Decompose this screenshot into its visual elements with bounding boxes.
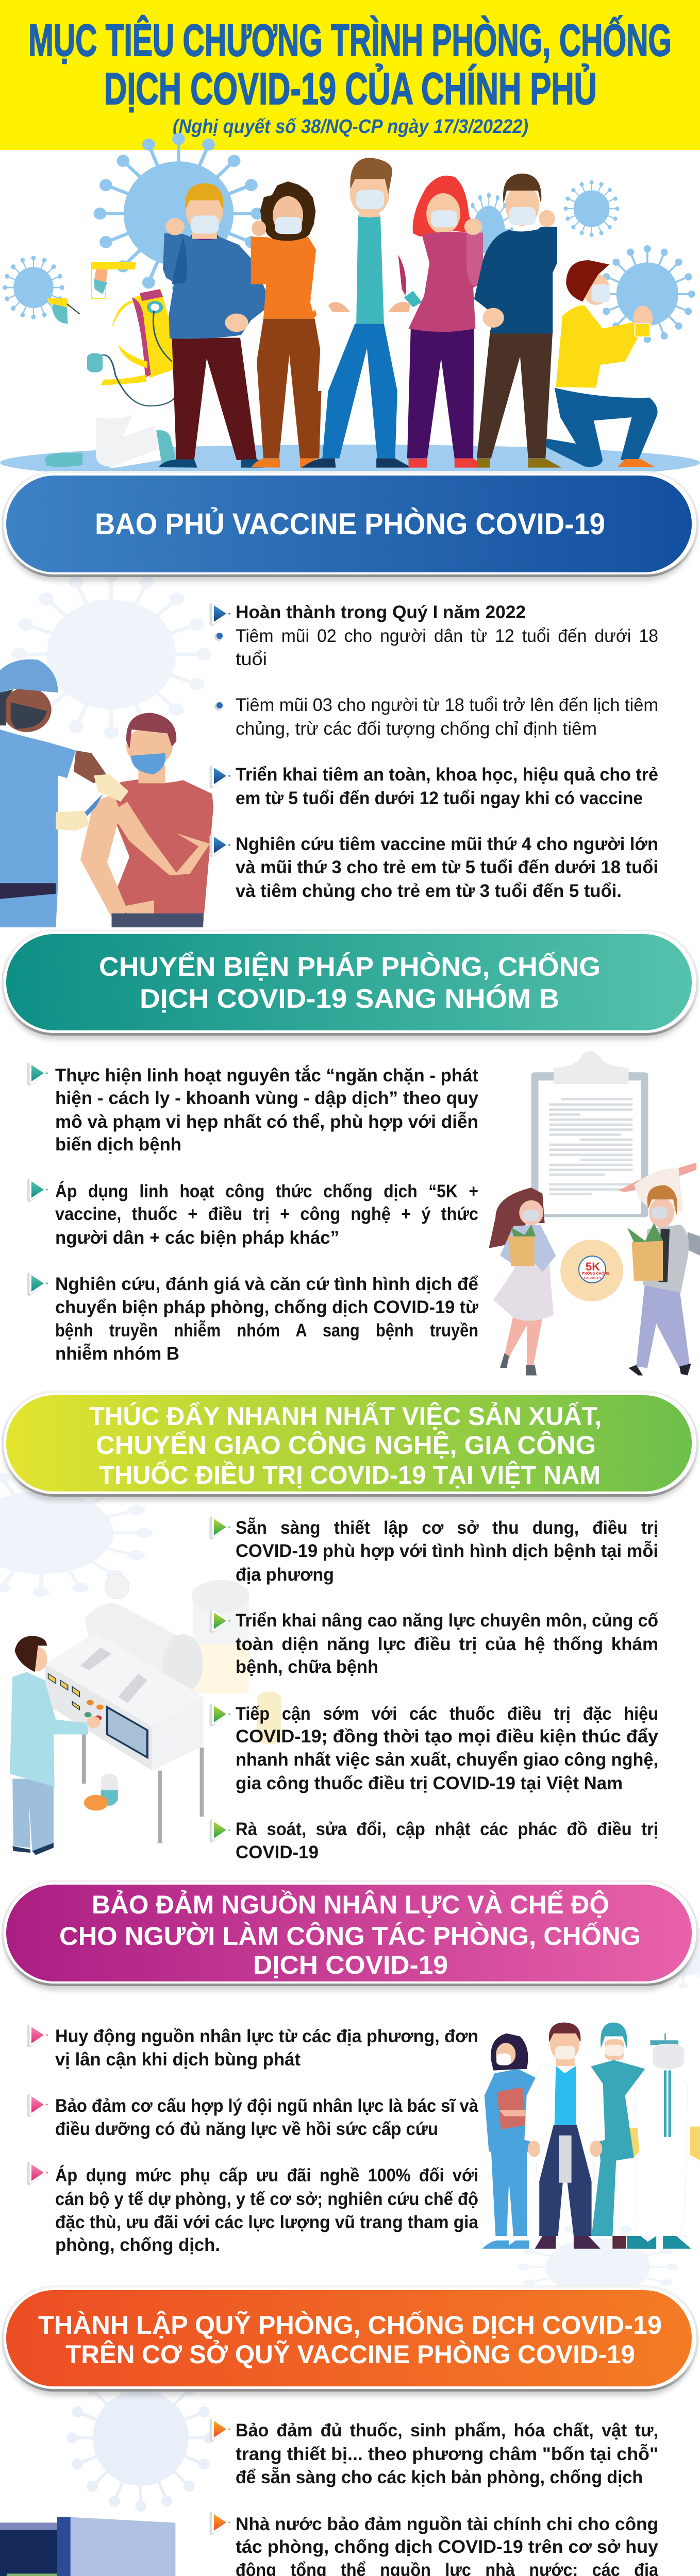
text: specific drugs: Tiếp cận sớm với các thuốc điều trị đặc hiệu	[236, 1704, 658, 1724]
text: second dose: tuổi	[236, 649, 267, 669]
icon: pills	[84, 1774, 118, 1810]
heading text: DỊCH COVID-19 SANG NHÓM B	[140, 984, 559, 1014]
bullets: section 3	[211, 1517, 659, 1862]
heading text: THÚC ĐẨY NHANH NHẤT VIỆC SẢN XUẤT,	[89, 1402, 602, 1431]
text: second dose	[236, 626, 658, 669]
bullet icon	[211, 1518, 230, 1538]
text: research fourth dose	[236, 834, 658, 901]
text: research fourth dose: và mũi thứ 3 cho trẻ em từ 5 tuổi đến dưới 18 tuổi	[236, 857, 658, 877]
illustration: nurse vaccinating a patient	[0, 659, 213, 927]
bullet icon	[211, 836, 230, 856]
icon: 5K badge: COVID-19	[584, 1277, 601, 1280]
icon: 5K badge	[560, 1240, 623, 1301]
text: research and assess: chuyển biện pháp phòng, chống dịch COVID-19 từ	[55, 1297, 479, 1317]
hazmat worker	[625, 2033, 700, 2249]
person: doctor in white coat	[302, 158, 422, 468]
text: children vaccination: Triển khai tiêm an toàn, khoa học, hiệu quả cho trẻ	[236, 765, 658, 785]
text: 5K formula: người dân + các biện pháp khác”	[55, 1228, 339, 1248]
bullet icon	[29, 2026, 48, 2046]
person: orange sweater	[251, 181, 337, 468]
text: 5K formula	[55, 1181, 478, 1248]
illustration: clipboard and shoppers	[489, 1051, 700, 1376]
illustration: medical team	[482, 2023, 700, 2249]
bullet icon	[211, 1612, 230, 1632]
text: allowances: Áp dụng mức phụ cấp ưu đãi nghề 100% đối với	[55, 2165, 478, 2185]
text: specific drugs: nhanh nhất việc sản xuất, chuyển giao công nghệ,	[236, 1750, 658, 1770]
text: specific drugs: COVID-19; đồng thời tạo mọi điều kiện thúc đẩy	[236, 1726, 659, 1747]
text: supplies: Bảo đảm đủ thuốc, sinh phẩm, hóa chất, vật tư,	[236, 2420, 658, 2441]
nurse with clipboard	[482, 2033, 536, 2249]
bullet icon	[211, 767, 230, 787]
text: treatment facilities: Sẵn sàng thiết lập cơ sở thu dung, điều trị	[236, 1517, 658, 1538]
text: children vaccination	[236, 765, 658, 808]
bullets: section 1	[211, 602, 658, 901]
text: improve capacity: toàn diện năng lực điều trị của hệ thống khám	[236, 1634, 658, 1654]
text: supplies	[236, 2420, 658, 2487]
text: research and assess	[55, 1274, 479, 1364]
person: blue sweater	[158, 183, 266, 468]
heading text: TRÊN CƠ SỞ QUỸ VACCINE PHÒNG COVID-19	[65, 2340, 635, 2369]
title	[28, 15, 672, 114]
text: staffing structure	[55, 2096, 478, 2139]
text: mobilise staff: Huy động nguồn nhân lực từ các địa phương, đơn	[55, 2026, 478, 2046]
text: second dose: Tiêm mũi 02 cho người dân từ 12 tuổi đến dưới 18	[236, 626, 658, 646]
shopper: woman	[489, 1188, 556, 1376]
heading text	[59, 1890, 641, 1979]
text: children vaccination: em từ 5 tuổi đến dưới 12 tuổi ngay khi có vaccine	[236, 788, 643, 808]
person: pink sweater	[407, 176, 487, 468]
technician	[10, 1636, 101, 1855]
person: sprayer in protective suit	[45, 262, 178, 468]
illustration: man opening vault	[0, 2517, 218, 2576]
text: third dose	[236, 695, 658, 739]
heading: accelerate production	[2, 1391, 698, 1501]
bullets: section 2	[29, 1064, 479, 1364]
text: treatment facilities	[236, 1517, 658, 1585]
heading: human resources	[2, 1880, 698, 1990]
machine	[45, 1574, 281, 1843]
heading text: THUỐC ĐIỀU TRỊ COVID-19 TẠI VIỆT NAM	[99, 1460, 601, 1489]
text: 5K formula: Áp dụng linh hoạt công thức chống dịch “5K +	[55, 1181, 478, 1201]
vault door	[57, 2517, 175, 2576]
clipboard	[531, 1051, 700, 1256]
heading text: BẢO ĐẢM NGUỒN NHÂN LỰC VÀ CHẾ ĐỘ	[92, 1890, 609, 1919]
text: mobilise staff: vị lân cận khi dịch bùng phát	[55, 2049, 301, 2070]
watermark: background viruses	[0, 570, 700, 2576]
text: 5K formula: vaccine, thuốc + điều trị + công nghệ + ý thức	[55, 1204, 478, 1224]
vault interior	[0, 2523, 67, 2576]
bullet icon	[211, 604, 230, 624]
floor	[0, 445, 700, 481]
bullet icon	[29, 1274, 48, 1294]
text: review protocols: Rà soát, sửa đổi, cập nhật các phác đồ điều trị	[236, 1819, 658, 1839]
text: allowances: phòng, chống dịch.	[55, 2235, 220, 2255]
subtitle: (Nghị quyết số 38/NQ-CP ngày 17/3/20222)	[173, 116, 528, 138]
text: research fourth dose: và tiêm chủng cho trẻ em từ 3 tuổi đến 5 tuổi.	[236, 881, 622, 901]
text: research and assess: Nghiên cứu, đánh giá và căn cứ tình hình dịch để	[55, 1274, 478, 1294]
text: staffing structure: điều dưỡng có đủ năng lực về hồi sức cấp cứu	[55, 2119, 438, 2139]
bullets: section 5	[211, 2420, 659, 2576]
text: flexible principle: hiện - cách ly - khoanh vùng - dập dịch” theo quy	[55, 1088, 479, 1108]
heading: fund	[2, 2285, 698, 2396]
text: research and assess: bệnh truyền nhiễm nhóm A sang bệnh truyền	[55, 1320, 478, 1341]
heading text: DỊCH COVID-19	[253, 1951, 448, 1979]
person: navy sweater	[474, 174, 562, 468]
text: research fourth dose: Nghiên cứu tiêm vaccine mũi thứ 4 cho người lớn	[236, 834, 658, 854]
text: supplies: trang thiết bị... theo phương châm "bốn tại chỗ"	[236, 2444, 658, 2464]
heading text	[38, 2310, 662, 2369]
text: allowances	[55, 2165, 479, 2255]
surgeon	[587, 2023, 656, 2249]
text: third dose: chủng, trừ các đối tượng chống chỉ định tiêm	[236, 719, 597, 739]
text: review protocols: COVID-19	[236, 1842, 319, 1862]
text: state funding: Nhà nước bảo đảm nguồn tài chính chi cho công	[236, 2514, 658, 2534]
person: kneeling with spray	[545, 260, 658, 467]
text: third dose: Tiêm mũi 03 cho người từ 18 tuổi trở lên đến lịch tiêm	[236, 695, 658, 715]
text: improve capacity	[236, 1611, 658, 1677]
text: improve capacity: bệnh, chữa bệnh	[236, 1657, 378, 1677]
text: allowances: đặc thù, ưu đãi với các lực lượng vũ trang tham gia	[55, 2212, 479, 2232]
bullet icon	[211, 1821, 230, 1841]
text: state funding	[236, 2514, 659, 2576]
shopper: man	[627, 1185, 691, 1376]
heading text: CHO NGƯỜI LÀM CÔNG TÁC PHÒNG, CHỐNG	[59, 1921, 641, 1951]
heading text	[89, 1402, 602, 1489]
patient	[80, 713, 213, 927]
text: specific drugs: gia công thuốc điều trị COVID-19 tại Việt Nam	[236, 1773, 623, 1793]
heading text	[99, 952, 601, 1014]
illustration: people wearing masks against viruses	[0, 133, 700, 481]
sub bullet	[214, 633, 223, 641]
icon: viruses	[3, 133, 695, 343]
text: flexible principle: biến dịch bệnh	[55, 1134, 181, 1155]
text: complete in Q1 2022: Hoàn thành trong Quý I năm 2022	[236, 602, 526, 622]
bullet icon	[211, 2513, 230, 2533]
heading text: CHUYỂN BIỆN PHÁP PHÒNG, CHỐNG	[99, 952, 601, 982]
text: treatment facilities: COVID-19 phù hợp với tình hình dịch bệnh tại mỗi	[236, 1540, 658, 1561]
text: specific drugs	[236, 1704, 659, 1793]
heading text: CHUYỂN GIAO CÔNG NGHỆ, GIA CÔNG	[96, 1430, 596, 1460]
text: flexible principle	[55, 1065, 479, 1155]
text: review protocols	[236, 1819, 658, 1862]
bullet icon	[29, 2163, 48, 2183]
icon: 5K badge: PHÒNG CHỐNG	[582, 1270, 610, 1276]
sub bullet	[214, 702, 223, 710]
text: supplies: để sẵn sàng cho các kịch bản phòng, chống dịch	[236, 2467, 643, 2487]
heading: switch to group B	[2, 929, 698, 1040]
text: flexible principle: Thực hiện linh hoạt nguyên tắc “ngăn chặn - phát	[55, 1065, 478, 1086]
text: allowances: cán bộ y tế dự phòng, y tế cơ sở; nghiên cứu chế độ	[55, 2189, 478, 2209]
bullet icon	[211, 2420, 230, 2440]
text: mobilise staff	[55, 2026, 478, 2070]
title banner	[0, 0, 700, 150]
bullet icon	[29, 2095, 48, 2115]
text: improve capacity: Triển khai nâng cao năng lực chuyên môn, củng cố	[236, 1611, 658, 1631]
heading text: THÀNH LẬP QUỸ PHÒNG, CHỐNG DỊCH COVID-19	[38, 2310, 662, 2340]
text: flexible principle: mô và phạm vi hẹp nhất có thể, phù hợp với diễn	[55, 1111, 478, 1132]
illustration: technician at production machine	[10, 1574, 281, 1855]
text: staffing structure: Bảo đảm cơ cấu hợp lý đội ngũ nhân lực là bác sĩ và	[55, 2096, 478, 2116]
text: treatment facilities: địa phương	[236, 1565, 334, 1585]
heading text: BAO PHỦ VACCINE PHÒNG COVID-19	[95, 507, 605, 541]
bullet icon	[29, 1180, 48, 1200]
text: state funding: tác phòng, chống dịch COVID-19 trên cơ sở huy	[236, 2537, 659, 2557]
heading: vaccine coverage	[2, 471, 698, 581]
icon: 5K badge: 5K	[586, 1260, 600, 1273]
doctor in white coat	[525, 2023, 605, 2249]
bullet icon	[211, 1705, 230, 1725]
bullet icon	[29, 1064, 48, 1084]
bullets: section 4	[29, 2026, 479, 2255]
text: research and assess: nhiễm nhóm B	[55, 1343, 179, 1364]
nurse	[0, 659, 128, 927]
